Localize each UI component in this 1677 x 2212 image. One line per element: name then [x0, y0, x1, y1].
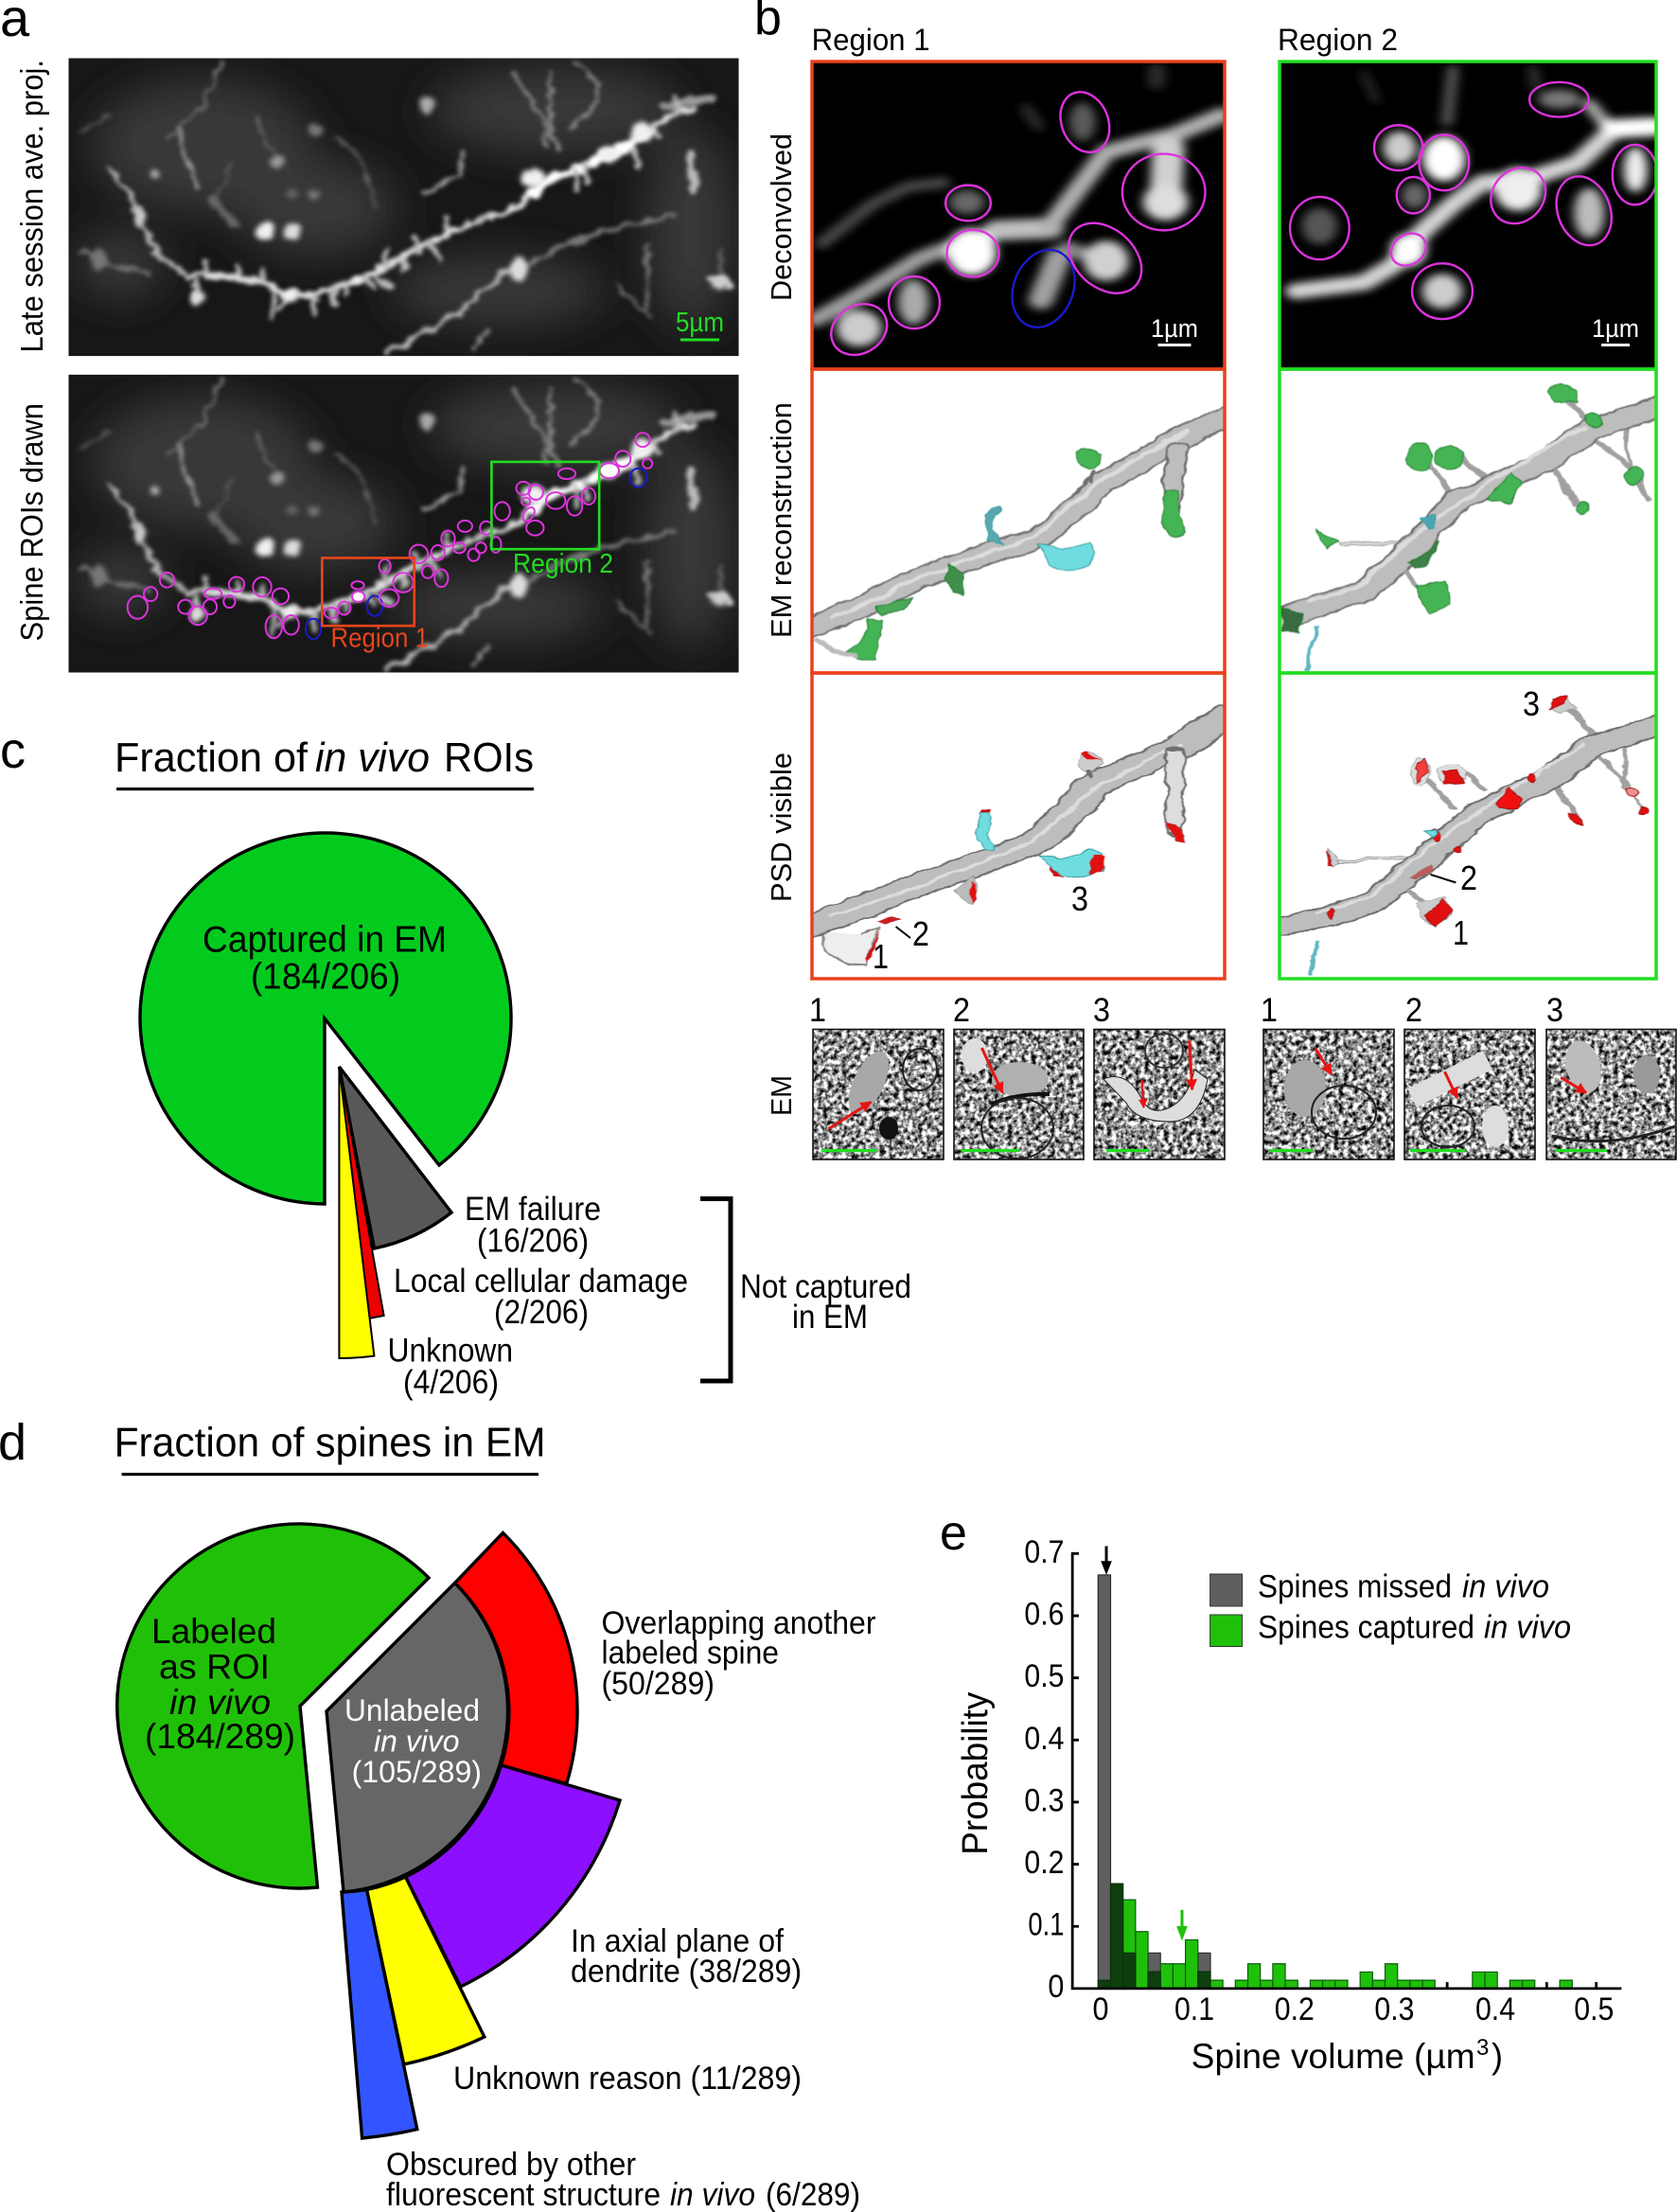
row label EM: EM	[765, 1075, 798, 1116]
slice: axial plane	[405, 1765, 620, 1987]
slice: local cellular damage	[339, 1067, 384, 1318]
label: axial plane	[571, 1923, 802, 1990]
label: unknown: (4/206)	[403, 1364, 499, 1401]
row label PSD visible: PSD visible	[765, 752, 798, 902]
spine numbers region 2: 1	[1453, 913, 1469, 952]
panel label e: e	[940, 1506, 967, 1561]
row label deconvolved: Deconvolved	[765, 133, 798, 301]
label: obscured	[386, 2147, 860, 2212]
label: unlabeled in vivo: Unlabeled	[344, 1693, 480, 1727]
spine numbers region 1: 2	[912, 914, 929, 953]
bars: spines captured in vivo	[1123, 1900, 1572, 1989]
x axis tick labels	[1092, 1991, 1614, 2027]
y axis tick labels	[1024, 1534, 1064, 2005]
label: local cellular damage: (2/206)	[494, 1294, 589, 1331]
label: EM failure	[465, 1191, 601, 1259]
y axis tick labels: 0	[1048, 1969, 1064, 2005]
x axis title: 3	[1476, 2035, 1489, 2061]
legend item: missed: in vivo	[1462, 1569, 1549, 1605]
spine numbers region 2: 2	[1460, 858, 1477, 897]
y axis tick labels: 0.1	[1028, 1907, 1064, 1943]
spine numbers region 1	[873, 879, 1088, 976]
spine numbers region 1: 3	[1071, 879, 1088, 918]
EM tile labels: 3	[1546, 992, 1563, 1029]
pie chart c	[140, 833, 511, 1358]
label: unknown reason: Unknown reason (11/289)	[453, 2061, 802, 2097]
y label: late session: Late session ave. proj.	[14, 60, 49, 352]
label: obscured: in vivo	[670, 2177, 755, 2212]
x axis title: )	[1492, 2037, 1503, 2076]
PSD visible region 2	[1279, 697, 1661, 976]
label: axial plane: dendrite (38/289)	[571, 1954, 802, 1990]
title c: ROIs	[444, 734, 534, 781]
label: not captured in EM	[740, 1268, 911, 1336]
legend item: missed	[1210, 1569, 1549, 1606]
label: overlapping: Overlapping another	[602, 1605, 876, 1641]
slice: overlapping	[455, 1532, 577, 1783]
histogram e	[1072, 1546, 1621, 1989]
region 2 label: Region 2	[513, 549, 613, 579]
EM tile region 2 spine 1	[1263, 1030, 1394, 1159]
x axis tick labels: 0.2	[1275, 1991, 1315, 2027]
EM tile region 2 spine 3	[1546, 1030, 1676, 1159]
y axis tick labels: 0.6	[1024, 1597, 1064, 1633]
label: labeled as ROI	[145, 1612, 295, 1756]
frame: region 1 column	[812, 62, 1225, 979]
label: captured in EM: Captured in EM	[203, 920, 447, 961]
label: labeled as ROI: Labeled	[151, 1612, 276, 1651]
label: unknown	[388, 1333, 513, 1401]
x axis tick labels: 0.5	[1574, 1991, 1614, 2027]
label: unlabeled in vivo: in vivo	[374, 1725, 460, 1759]
label: labeled as ROI: in vivo	[169, 1683, 271, 1722]
label: captured in EM: (184/206)	[251, 957, 400, 998]
title c: in vivo	[315, 734, 430, 781]
y label: spine ROIs: Spine ROIs drawn	[14, 403, 49, 642]
spine ROI ellipses	[128, 433, 652, 639]
spine numbers region 2: 3	[1523, 684, 1540, 723]
slice: unknown reason	[367, 1877, 485, 2064]
x axis tick labels: 0.1	[1174, 1991, 1214, 2027]
panel a: late session image	[68, 58, 739, 356]
label: unlabeled in vivo: (105/289)	[352, 1755, 482, 1789]
legend item: captured: in vivo	[1484, 1609, 1571, 1645]
EM tile region 1 spine 2	[954, 1030, 1084, 1159]
frame: region 2 column	[1280, 62, 1656, 979]
EM tile region 1 spine 1	[813, 1030, 944, 1159]
legend item: captured	[1210, 1609, 1571, 1647]
label: EM failure: (16/206)	[477, 1223, 589, 1259]
y axis tick labels: 0.7	[1024, 1534, 1064, 1570]
column heading region 2: Region 2	[1278, 23, 1398, 57]
label: labeled as ROI: (184/289)	[145, 1717, 295, 1756]
y axis tick labels: 0.3	[1024, 1782, 1064, 1818]
title c	[115, 734, 534, 790]
label: captured in EM	[203, 920, 447, 998]
arrow: missed median	[1101, 1546, 1112, 1575]
scale bar 5 um: 5µm	[676, 308, 724, 338]
spine numbers region 2	[1431, 684, 1540, 952]
label: EM failure: EM failure	[465, 1191, 601, 1228]
region 2 box	[491, 462, 599, 549]
label: overlapping: (50/289)	[602, 1666, 715, 1702]
ROI ellipses region 2	[1290, 82, 1657, 319]
x axis tick labels: 0.3	[1374, 1991, 1414, 2027]
legend item: captured: Spines captured	[1258, 1609, 1474, 1645]
label: obscured: Obscured by other	[386, 2147, 636, 2183]
column heading region 1: Region 1	[812, 23, 930, 57]
slice: captured in EM	[140, 833, 511, 1204]
slice: obscured	[342, 1889, 417, 2138]
EM reconstruction region 1	[810, 417, 1227, 660]
deconvolved image region 2	[1280, 62, 1657, 369]
EM tile region 1 spine 3	[1094, 1030, 1225, 1159]
spine numbers region 1: 1	[873, 937, 889, 976]
EM tile labels: 2	[953, 992, 970, 1029]
y axis title: Probability	[956, 1692, 996, 1855]
label: not captured in EM: in EM	[792, 1299, 868, 1336]
scale bar 1 um region 2: 1µm	[1592, 314, 1639, 343]
legend	[1210, 1569, 1571, 1647]
y axis tick labels: 0.4	[1024, 1721, 1064, 1757]
bars: spines missed in vivo	[1098, 1575, 1210, 1989]
scale bar 1 um region 1: 1µm	[1151, 314, 1198, 343]
slice: unknown	[339, 1067, 374, 1358]
label: obscured: (6/289)	[766, 2177, 860, 2212]
legend item: missed: Spines missed	[1258, 1569, 1452, 1605]
EM tile labels	[809, 992, 1563, 1029]
region 1 label: Region 1	[331, 623, 429, 653]
label: local cellular damage: Local cellular damage	[394, 1263, 688, 1300]
x axis tick labels: 0	[1092, 1991, 1109, 2027]
arrow: captured median	[1176, 1910, 1188, 1941]
scale bar 1 um region 1	[1153, 320, 1196, 346]
EM tile labels: 2	[1405, 992, 1422, 1029]
title c: Fraction of	[115, 734, 309, 781]
label: not captured in EM: Not captured	[740, 1268, 911, 1305]
y axis tick labels: 0.2	[1024, 1845, 1064, 1881]
PSD visible region 1	[810, 715, 1227, 965]
row label EM reconstruction: EM reconstruction	[765, 402, 798, 638]
slice: EM failure	[339, 1067, 451, 1248]
bars: overlap	[1098, 1884, 1210, 1989]
slice: unlabeled	[327, 1583, 508, 1892]
pie chart d	[117, 1524, 620, 2138]
label: obscured: fluorescent structure	[386, 2177, 661, 2212]
bracket	[700, 1198, 731, 1381]
label: unknown: Unknown	[388, 1333, 513, 1370]
panel a: spine ROIs image	[68, 375, 739, 673]
label: local cellular damage	[394, 1263, 688, 1331]
EM tile labels: 1	[1261, 992, 1278, 1029]
x axis title: Spine volume (µm	[1192, 2037, 1475, 2076]
EM tile labels: 1	[809, 992, 826, 1029]
EM tile labels: 3	[1093, 992, 1110, 1029]
label: axial plane: In axial plane of	[571, 1923, 785, 1959]
label: unlabeled in vivo	[344, 1693, 482, 1789]
label: overlapping	[602, 1605, 876, 1702]
panel label c: c	[0, 722, 26, 779]
x axis tick labels: 0.4	[1475, 1991, 1515, 2027]
ROI ellipses region 1	[821, 89, 1206, 361]
slice: labeled as ROI	[117, 1524, 429, 1888]
label: labeled as ROI: as ROI	[159, 1647, 270, 1687]
label: overlapping: labeled spine	[602, 1636, 779, 1672]
region 1 box	[322, 557, 415, 626]
scale bar 1 um region 2	[1594, 320, 1637, 346]
title d: Fraction of spines in EM	[115, 1420, 546, 1465]
axes	[1072, 1553, 1621, 1989]
EM tile region 2 spine 2	[1404, 1030, 1535, 1159]
deconvolved image region 1	[812, 62, 1225, 369]
EM reconstruction region 2	[1279, 384, 1661, 671]
y axis tick labels: 0.5	[1024, 1658, 1064, 1694]
